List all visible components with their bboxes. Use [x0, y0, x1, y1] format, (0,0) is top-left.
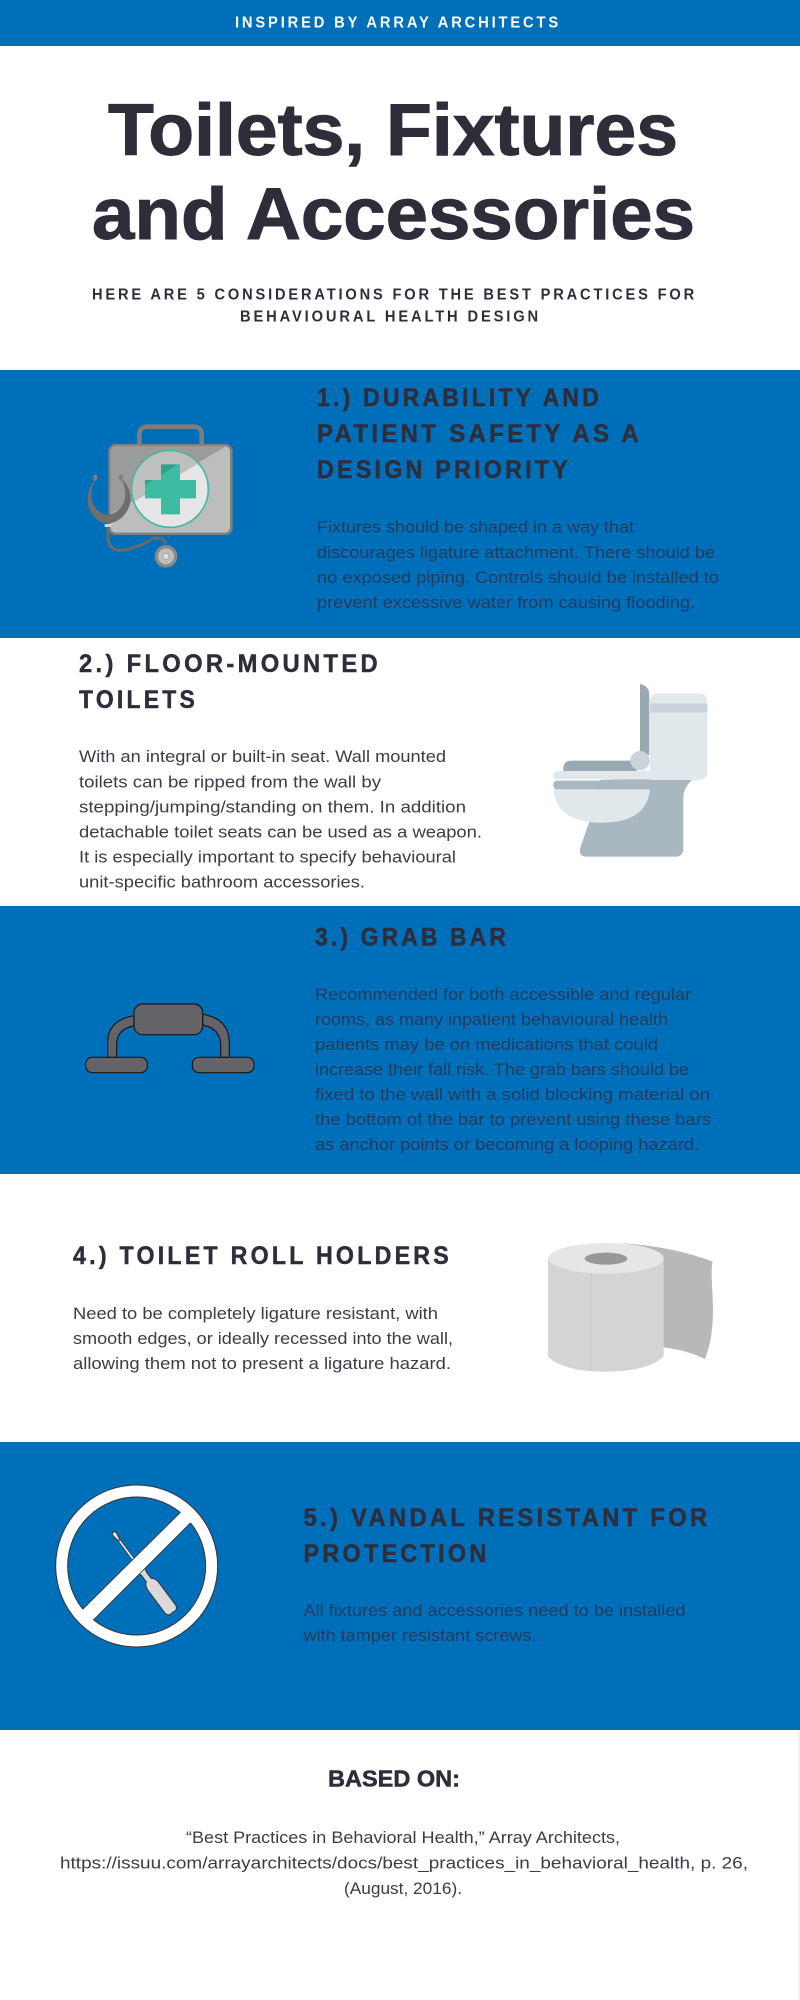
heading 3: 3.) GRAB BAR — [315, 924, 509, 952]
body 3 — [315, 985, 711, 1154]
body 3: patients may be on medications that could — [315, 1035, 658, 1054]
subtitle — [92, 286, 697, 326]
body 5: All fixtures and accessories need to be installed — [304, 1601, 686, 1620]
subtitle: HERE ARE 5 CONSIDERATIONS FOR THE BEST PRACTICES FOR — [92, 286, 697, 304]
body 2: With an integral or built-in seat. Wall mounted — [79, 747, 446, 766]
body 2: unit-specific bathroom accessories. — [79, 872, 365, 892]
body 4: smooth edges, or ideally recessed into the wall, — [73, 1329, 453, 1348]
panel: 1 durability and patient safety — [0, 370, 800, 638]
body 3: increase their fall risk. The grab bars should be — [315, 1060, 689, 1079]
heading 4: 4.) TOILET ROLL HOLDERS — [73, 1242, 452, 1270]
body 3: Recommended for both accessible and regular — [315, 985, 691, 1004]
panel: 5 vandal resistant — [0, 1442, 800, 1730]
heading 1: DESIGN PRIORITY — [317, 456, 571, 484]
top banner — [0, 0, 800, 46]
heading 5: PROTECTION — [304, 1540, 490, 1568]
icon: toilet — [553, 684, 707, 857]
footer heading: BASED ON: — [328, 1766, 460, 1792]
citation — [60, 1828, 748, 1898]
heading 2: 2.) FLOOR-MOUNTED — [79, 650, 381, 678]
body 2: toilets can be ripped from the wall by — [79, 772, 382, 792]
body 2: It is especially important to specify behavioural — [79, 848, 456, 866]
body 2: detachable toilet seats can be used as a weapon. — [79, 822, 482, 842]
body 3: as anchor points or becoming a looping hazard. — [315, 1135, 699, 1154]
heading 1 — [317, 384, 642, 484]
citation: “Best Practices in Behavioral Health,” Array Architects, — [186, 1828, 620, 1847]
citation: https://issuu.com/arrayarchitects/docs/best_practices_in_behavioral_health, p. 26, — [60, 1854, 748, 1872]
body 1: Fixtures should be shaped in a way that — [317, 518, 634, 536]
heading 2 — [79, 650, 381, 714]
icon: toilet paper roll — [548, 1243, 713, 1372]
heading 1: 1.) DURABILITY AND — [317, 384, 602, 412]
heading 2: TOILETS — [79, 686, 198, 714]
panel: 4 toilet roll holders — [0, 1174, 800, 1442]
body 5 — [302, 1601, 686, 1645]
heading 5 — [304, 1504, 710, 1568]
title: and Accessories — [92, 174, 695, 255]
panel: 2 floor-mounted toilets — [0, 638, 800, 906]
body 5: with tamper resistant screws. — [302, 1626, 536, 1645]
footer: sources — [60, 1766, 748, 1898]
title: Toilets, Fixtures — [108, 90, 678, 171]
body 1: prevent excessive water from causing flooding. — [317, 593, 695, 612]
body 3: rooms, as many inpatient behavioural health — [315, 1010, 668, 1029]
body 4: allowing them not to present a ligature hazard. — [73, 1354, 451, 1373]
panel: 3 grab bar — [0, 906, 800, 1174]
body 4 — [73, 1304, 453, 1373]
heading 5: 5.) VANDAL RESISTANT FOR — [304, 1504, 710, 1532]
body 4: Need to be completely ligature resistant, with — [73, 1304, 438, 1323]
body 1: discourages ligature attachment. There should be — [317, 543, 715, 562]
title — [92, 90, 695, 255]
body 3: fixed to the wall with a solid blocking material on — [315, 1085, 710, 1104]
body 1 — [317, 518, 719, 612]
icon: first aid kit with stethoscope — [88, 427, 233, 568]
body 1: no exposed piping. Controls should be installed to — [317, 568, 719, 587]
heading 1: PATIENT SAFETY AS A — [317, 420, 642, 448]
body 2 — [79, 747, 482, 892]
top banner: INSPIRED BY ARRAY ARCHITECTS — [235, 14, 561, 32]
body 2: stepping/jumping/standing on them. In addition — [79, 798, 466, 816]
subtitle: BEHAVIOURAL HEALTH DESIGN — [240, 308, 541, 326]
icon: grab bar — [86, 1004, 254, 1073]
body 3: the bottom of the bar to prevent using these bars — [315, 1110, 711, 1129]
citation: (August, 2016). — [344, 1879, 462, 1898]
icon: prohibited screwdriver — [56, 1485, 218, 1647]
